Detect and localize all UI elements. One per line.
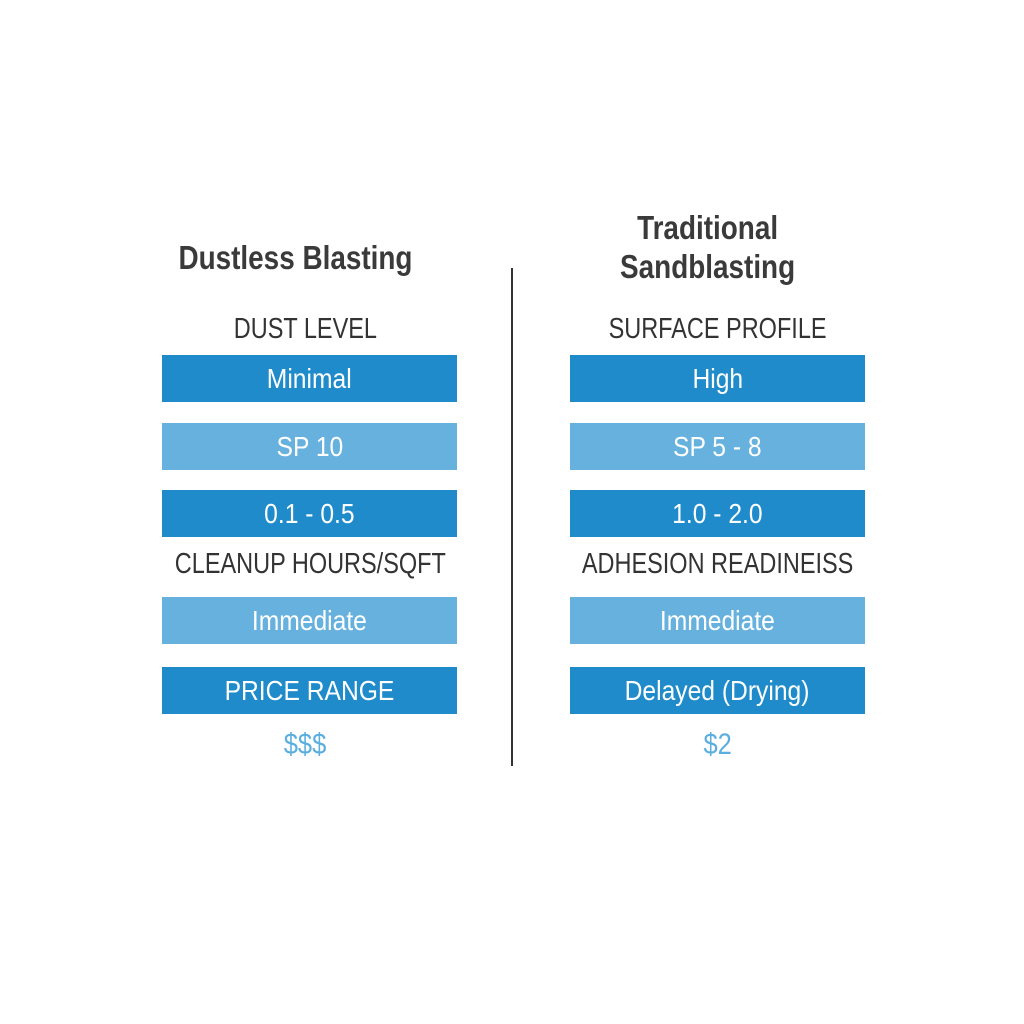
price: $2: $2: [704, 728, 732, 761]
bar: 1.0 - 2.0: 1.0 - 2.0: [672, 498, 763, 529]
label: adhesion readiness: ADHESION READINEISS: [582, 548, 854, 580]
bar: SP 5 - 8: SP 5 - 8: [673, 431, 762, 462]
heading: Traditional Sandblasting: Sandblasting: [620, 248, 795, 285]
bar: Immediate: [570, 597, 865, 644]
bar: Minimal: [162, 355, 457, 402]
bar: 1.0 - 2.0: [570, 490, 865, 537]
bar: SP 5 - 8: [570, 423, 865, 470]
heading: Dustless Blasting: Dustless Blasting: [178, 239, 412, 276]
panel: right column: [570, 313, 865, 761]
bar: Price range: [162, 667, 457, 714]
heading: Traditional Sandblasting: Traditional: [637, 209, 778, 246]
bar: Immediate: Immediate: [252, 605, 367, 636]
bar: SP 10: SP 10: [276, 431, 343, 462]
bar: Price range: PRICE RANGE: [225, 675, 394, 706]
label: dust level: DUST LEVEL: [233, 313, 377, 345]
bar: High: [570, 355, 865, 402]
bar: 0.1 - 0.5: 0.1 - 0.5: [264, 498, 355, 529]
bar: SP 10: [162, 423, 457, 470]
price: $$$: $$$: [284, 728, 326, 761]
label: surface profile: SURFACE PROFILE: [609, 313, 827, 345]
bar: Delayed: Delayed (Drying): [625, 675, 810, 706]
label: cleanup hours: CLEANUP HOURS/SQFT: [174, 548, 446, 580]
bar: Immediate: Immediate: [660, 605, 775, 636]
divider: [511, 268, 513, 766]
bar: Minimal: Minimal: [267, 363, 352, 394]
bar: 0.1 - 0.5: [162, 490, 457, 537]
bar: High: High: [692, 363, 743, 394]
panel: left column: [162, 313, 457, 761]
bar: Immediate: [162, 597, 457, 644]
bar: Delayed: [570, 667, 865, 714]
heading: Traditional Sandblasting: [620, 209, 795, 285]
